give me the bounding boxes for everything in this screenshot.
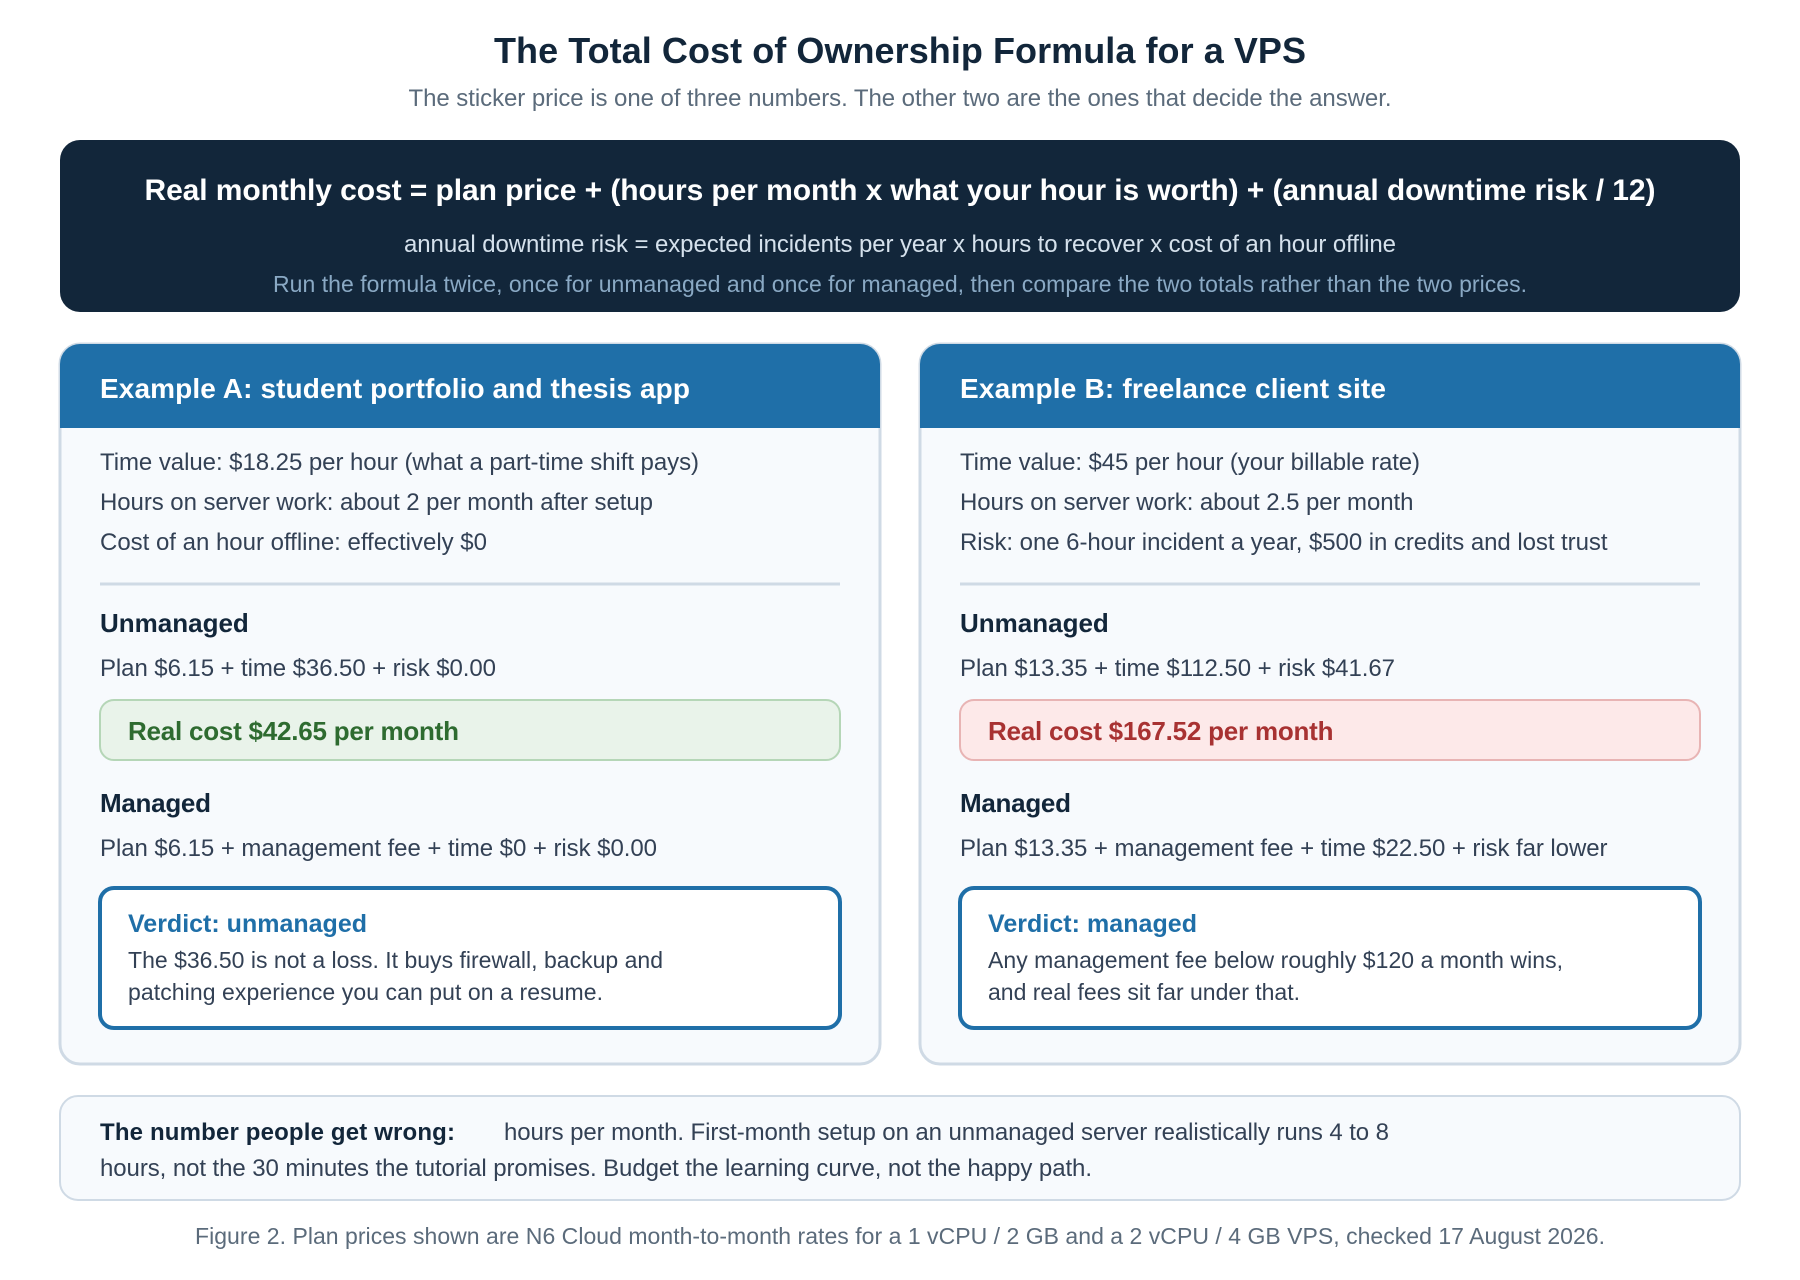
example A header: [60, 344, 880, 428]
figure caption: Figure 2. Plan prices shown are N6 Cloud month-to-month rates for a 1 vCPU / 2 GB and a 2 vCPU / 4 GB VPS, checked 17 August 2026.: [195, 1223, 1605, 1249]
example B assumptions: Risk: one 6-hour incident a year, $500 in credits and lost trust: [960, 529, 1608, 556]
subtitle: The sticker price is one of three numbers. The other two are the ones that decide the answer.: [408, 85, 1392, 112]
example B header: [920, 344, 1740, 428]
example A header: Example A: student portfolio and thesis app: [100, 373, 690, 404]
example A assumptions: Hours on server work: about 2 per month after setup: [100, 489, 653, 516]
example B assumptions: [960, 449, 1608, 556]
example A verdict: patching experience you can put on a resume.: [128, 979, 603, 1005]
formula headline: Real monthly cost = plan price + (hours per month x what your hour is worth) + (annual downtime risk / 12): [144, 174, 1656, 207]
downtime risk definition: annual downtime risk = expected incidents per year x hours to recover x cost of an hour offline: [404, 231, 1396, 258]
callout: the number people get wrong: hours per month. First-month setup on an unmanaged server realistically runs 4 to 8: [504, 1119, 1389, 1146]
example B assumptions: Hours on server work: about 2.5 per month: [960, 489, 1414, 516]
callout: the number people get wrong: The number people get wrong:: [100, 1119, 455, 1146]
example B verdict: Verdict: managed: [988, 910, 1197, 938]
example A managed sum: Plan $6.15 + management fee + time $0 + risk $0.00: [100, 835, 657, 862]
example B managed sum: Plan $13.35 + management fee + time $22.50 + risk far lower: [960, 835, 1608, 862]
title: The Total Cost of Ownership Formula for a VPS: [494, 30, 1306, 71]
example A verdict: Verdict: unmanaged: [128, 910, 367, 938]
example A assumptions: [100, 449, 699, 556]
example B unmanaged heading: Unmanaged: [960, 608, 1109, 638]
example A unmanaged sum: Plan $6.15 + time $36.50 + risk $0.00: [100, 655, 496, 682]
callout: the number people get wrong: [60, 1096, 1740, 1200]
panel: example A: [60, 344, 880, 1064]
example A verdict: The $36.50 is not a loss. It buys firewall, backup and: [128, 947, 663, 973]
example B verdict: [960, 888, 1700, 1028]
panel: example B: [920, 344, 1740, 1064]
example A unmanaged heading: Unmanaged: [100, 608, 249, 638]
panel: formula banner: [60, 140, 1740, 312]
example B header: Example B: freelance client site: [960, 373, 1386, 404]
example B managed heading: Managed: [960, 788, 1071, 818]
example B unmanaged sum: Plan $13.35 + time $112.50 + risk $41.67: [960, 655, 1395, 682]
callout: the number people get wrong: hours, not the 30 minutes the tutorial promises. Budget the learning curve, not the happy path.: [100, 1155, 1092, 1182]
example B real cost callout: [960, 700, 1700, 760]
example B verdict: Any management fee below roughly $120 a month wins,: [988, 947, 1563, 973]
example A managed heading: Managed: [100, 788, 211, 818]
example B verdict: and real fees sit far under that.: [988, 979, 1300, 1005]
example B assumptions: Time value: $45 per hour (your billable rate): [960, 449, 1420, 476]
example A assumptions: Time value: $18.25 per hour (what a part-time shift pays): [100, 449, 699, 476]
example A real cost callout: [100, 700, 840, 760]
example A verdict: [100, 888, 840, 1028]
example B real cost callout: Real cost $167.52 per month: [988, 716, 1334, 746]
example A real cost callout: Real cost $42.65 per month: [128, 716, 459, 746]
example A assumptions: Cost of an hour offline: effectively $0: [100, 529, 487, 556]
formula instruction: Run the formula twice, once for unmanaged and once for managed, then compare the two totals rather than the two prices.: [273, 271, 1527, 297]
